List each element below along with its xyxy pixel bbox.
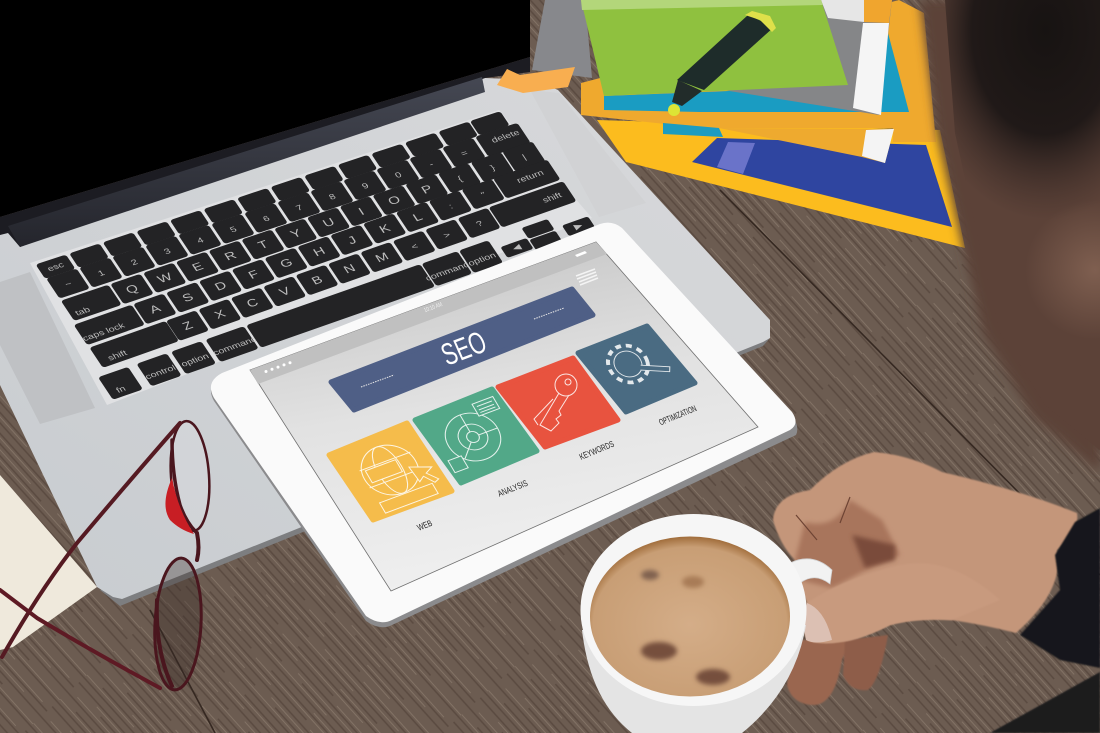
laptop hinge bbox=[0, 57, 530, 247]
tablet body bbox=[211, 223, 796, 622]
paper note bbox=[0, 475, 97, 650]
icon: menu lines bbox=[576, 269, 598, 285]
tablet screen bbox=[250, 242, 758, 591]
curled fingers and shadow bbox=[795, 500, 900, 588]
tile: analysis bbox=[415, 389, 537, 499]
coffee cup bbox=[580, 514, 832, 733]
tile: web bbox=[329, 423, 452, 533]
cup body bbox=[582, 625, 806, 733]
status bar bbox=[250, 242, 607, 384]
icon: highlighter marker bbox=[668, 11, 776, 116]
laptop bbox=[0, 0, 770, 606]
fingers under cup bbox=[787, 635, 888, 705]
keyboard keys bbox=[36, 111, 597, 400]
icon: radial chart bbox=[425, 396, 523, 473]
cup rim bbox=[580, 514, 806, 706]
thumb bbox=[804, 563, 1000, 643]
icon: gear and magnifier bbox=[602, 338, 673, 386]
laptop screen bbox=[0, 0, 530, 217]
blurred head in foreground bbox=[920, 0, 1100, 473]
SEO banner bbox=[331, 289, 593, 410]
tablet bbox=[211, 223, 797, 627]
icon: globe with cursor bbox=[351, 434, 446, 513]
tile: optimization: OPTIMIZATION bbox=[657, 403, 698, 428]
tile: keywords bbox=[498, 358, 618, 462]
icon: keys bbox=[534, 374, 577, 431]
tile: optimization bbox=[578, 326, 698, 428]
hand back and thumb bbox=[773, 452, 1077, 643]
status bar: 10:10 AM bbox=[423, 302, 444, 314]
keyboard well bbox=[30, 110, 592, 405]
glasses bbox=[0, 420, 213, 691]
SEO banner: SEO bbox=[436, 324, 492, 372]
tile: analysis: ANALYSIS bbox=[496, 478, 529, 499]
coffee surface bbox=[590, 536, 790, 696]
sticky note tab bbox=[497, 67, 575, 93]
thumbnail bbox=[804, 603, 832, 642]
black sleeve bbox=[990, 508, 1100, 733]
hand bbox=[773, 452, 1077, 705]
tile: web: WEB bbox=[415, 518, 434, 533]
folders and booklets stack bbox=[532, 0, 965, 248]
tile: keywords: KEYWORDS bbox=[577, 439, 616, 462]
cup handle bbox=[790, 559, 832, 584]
finger creases bbox=[796, 497, 850, 540]
